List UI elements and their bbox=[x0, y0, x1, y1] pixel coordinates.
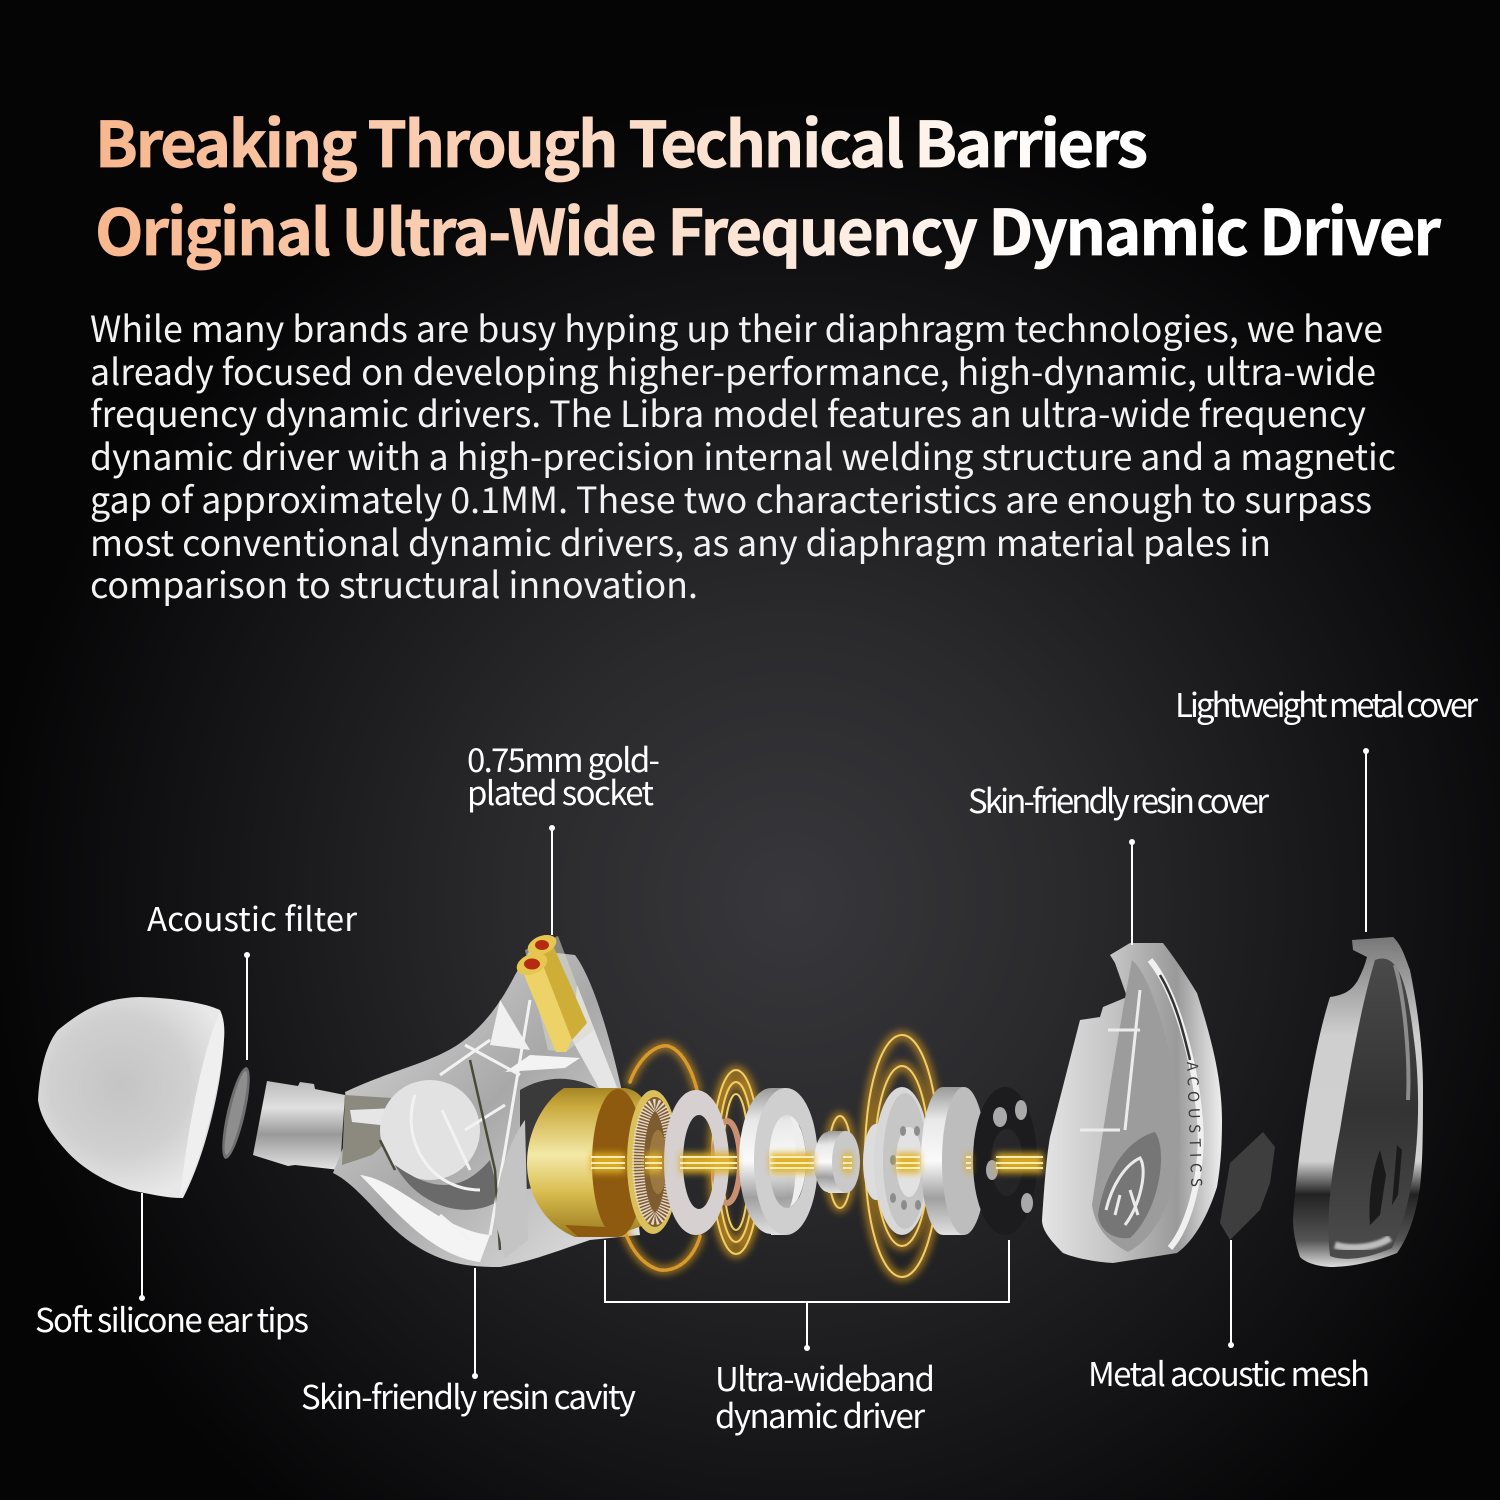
leader: resin cavity bbox=[472, 1268, 478, 1379]
leader: acoustic mesh bbox=[1228, 1240, 1234, 1348]
driver: small pole piece bbox=[814, 1131, 860, 1193]
earphone cavity bbox=[253, 931, 640, 1267]
icon: silicone ear tip bbox=[38, 997, 224, 1198]
label: gold-plated socket: plated socket bbox=[467, 767, 654, 815]
glow halos bbox=[618, 1035, 939, 1277]
body paragraph: already focused on developing higher-performance, high-dynamic, ultra-wide bbox=[90, 344, 1376, 396]
label: dynamic driver: Ultra-wideband bbox=[715, 1353, 935, 1401]
resin cover bbox=[1042, 943, 1222, 1263]
leader: resin cover bbox=[1129, 839, 1135, 945]
icon: acoustic filter bbox=[217, 1065, 255, 1161]
driver: black mount ring bbox=[973, 1087, 1037, 1235]
body paragraph: frequency dynamic drivers. The Libra model features an ultra-wide frequency bbox=[90, 386, 1366, 438]
leader: metal cover bbox=[1363, 748, 1369, 932]
title: Breaking Through Technical Barriers bbox=[95, 95, 1148, 186]
metal acoustic mesh bbox=[1220, 1132, 1275, 1240]
wave lines bbox=[712, 1035, 939, 1277]
driver: perforated plate bbox=[863, 1087, 930, 1235]
driver: solid silver magnet bbox=[921, 1087, 986, 1235]
body paragraph: gap of approximately 0.1MM. These two characteristics are enough to surpass bbox=[90, 472, 1372, 524]
driver: diaphragm bbox=[627, 1090, 679, 1234]
label: ear tips: Soft silicone ear tips bbox=[35, 1294, 309, 1342]
title bbox=[95, 95, 1442, 274]
leader: gold-plated socket bbox=[549, 825, 555, 935]
body paragraph: comparison to structural innovation. bbox=[90, 557, 698, 609]
label: gold-plated socket: 0.75mm gold- bbox=[467, 734, 660, 782]
label: dynamic driver bbox=[715, 1353, 935, 1438]
title: Original Ultra-Wide Frequency Dynamic Driver bbox=[95, 183, 1442, 274]
icon: gold-plated socket bbox=[513, 931, 594, 1052]
gold energy beam bbox=[591, 1153, 1043, 1173]
cavity highlights bbox=[342, 985, 620, 1262]
label: dynamic driver: dynamic driver bbox=[715, 1390, 925, 1438]
body paragraph: dynamic driver with a high-precision internal welding structure and a magnetic bbox=[90, 429, 1396, 481]
label: gold-plated socket bbox=[467, 734, 660, 815]
resin cavity shell bbox=[333, 950, 640, 1267]
leader: driver bracket bbox=[605, 1240, 1009, 1351]
callout labels bbox=[35, 679, 1478, 1438]
driver: gold housing bbox=[527, 1088, 645, 1237]
label: resin cavity: Skin-friendly resin cavity bbox=[301, 1371, 636, 1419]
label: acoustic mesh: Metal acoustic mesh bbox=[1088, 1348, 1370, 1396]
cover engraving: ACOUSTICS bbox=[1182, 1061, 1207, 1187]
body paragraph: While many brands are busy hyping up their diaphragm technologies, we have bbox=[90, 301, 1383, 353]
driver: thin silver washer bbox=[664, 1090, 729, 1235]
label: resin cover: Skin-friendly resin cover bbox=[968, 775, 1269, 823]
callout leader lines bbox=[139, 748, 1369, 1379]
body paragraph bbox=[90, 301, 1396, 609]
body paragraph: most conventional dynamic drivers, as any diaphragm material pales in bbox=[90, 515, 1271, 567]
leader: ear tips bbox=[139, 1193, 145, 1301]
nozzle bbox=[253, 1081, 345, 1170]
label: lightweight metal cover: Lightweight metal cover bbox=[1175, 679, 1478, 727]
speckled driver arcs bbox=[618, 1046, 700, 1270]
driver: copper voice coil bbox=[714, 1121, 740, 1203]
driver: thick silver ring bbox=[739, 1088, 818, 1235]
lightweight metal cover bbox=[1293, 937, 1423, 1267]
gold sound waves bbox=[618, 1035, 939, 1277]
label: acoustic filter: Acoustic filter bbox=[147, 893, 357, 941]
leader: acoustic filter bbox=[244, 952, 250, 1060]
